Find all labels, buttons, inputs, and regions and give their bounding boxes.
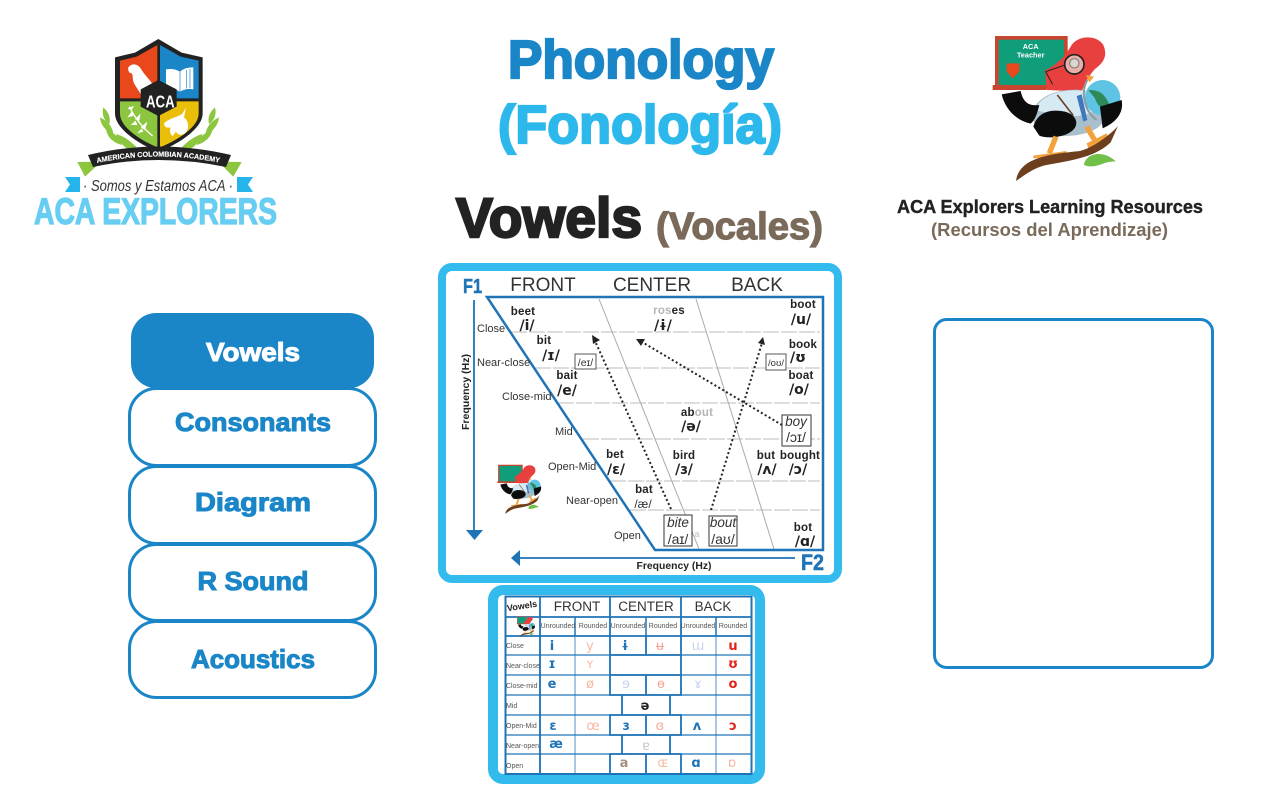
axis title: vertical frequency: Frequency (Hz): [460, 354, 472, 430]
height labels: Close-mid: [502, 391, 552, 403]
table vowel symbols: ɒ: [728, 756, 736, 771]
table headings: CENTER: [618, 599, 674, 614]
table vowel symbols: ɐ: [642, 739, 650, 754]
icon: chalkboard: Teacher: [1017, 51, 1045, 60]
diphthong box: eɪ: /eɪ/: [578, 357, 593, 369]
diphthong box: bite: [664, 515, 692, 547]
vowel word labels: bird: [673, 450, 695, 462]
table vowel symbols: ɞ: [656, 719, 664, 734]
panel: vowel chart table: [493, 590, 760, 779]
table vowel symbols: i: [550, 639, 554, 654]
table vowel symbols: ʊ: [728, 657, 738, 672]
diphthong box: oʊ: [766, 354, 786, 370]
table grid: [505, 596, 752, 774]
table row labels: Close: [506, 643, 524, 650]
banner: American Colombian Academy: AMERICAN COLOMBIAN ACADEMY: [97, 151, 220, 163]
vowel word labels: but: [757, 450, 775, 462]
table headings: BACK: [695, 599, 731, 614]
table vowel symbols: ɵ: [657, 677, 665, 692]
arrow: bite diphthong: [592, 335, 671, 509]
table row labels: Open-Mid: [506, 723, 537, 730]
diphthong box: eɪ: [575, 354, 596, 369]
table vowel symbols: ø: [586, 677, 594, 692]
vowel word labels: a: [694, 529, 700, 539]
chart: trapezoid grid: [487, 297, 823, 550]
vowel word labels: /ʊ: [790, 350, 806, 366]
table vowel symbols: ɑ: [691, 756, 701, 771]
banner: American Colombian Academy: [88, 146, 231, 167]
button: Consonants: Consonants: [175, 407, 331, 437]
button: Vowels (active): Vowels: [206, 337, 300, 367]
vowel word labels: bought: [780, 450, 820, 462]
table headings: [554, 599, 731, 614]
table row labels: Mid: [506, 703, 517, 710]
icon: chalkboard: [993, 36, 1068, 90]
table subheadings: Rounded: [719, 623, 747, 630]
vowel word labels: /ʌ/: [757, 462, 778, 478]
brand name: ACA EXPLORERS: [34, 191, 277, 232]
button: Consonants: [130, 388, 376, 466]
vowel word labels: /ɔ/: [789, 462, 808, 478]
motto: · Somos y Estamos ACA ·: [83, 178, 233, 195]
title: Fonología: (Fonología): [498, 95, 782, 155]
button: Diagram: [130, 466, 376, 544]
caption: Learning Resources: ACA Explorers Learning Resources: [897, 196, 1203, 217]
button: R Sound: R Sound: [198, 566, 308, 596]
table vowel symbols: œ: [586, 719, 600, 734]
vowel word labels: bat: [635, 484, 653, 496]
icon: chalkboard: ACA: [1023, 42, 1039, 51]
height labels: Open-Mid: [548, 461, 596, 473]
navigation menu: [130, 313, 376, 698]
table vowel symbols: ɯ: [692, 639, 704, 654]
arrow: bout diphthong: [711, 337, 765, 510]
vowel word labels: /e/: [557, 383, 578, 399]
table row labels: [506, 643, 540, 770]
icon: tiny bird mascot: [517, 617, 535, 637]
title: Phonology: Phonology: [508, 30, 774, 90]
table headings: FRONT: [554, 599, 600, 614]
button: Vowels (active): [131, 313, 374, 388]
table vowel symbols: ɘ: [622, 677, 630, 692]
arrow: F2 frequency axis: [511, 550, 795, 566]
vowel word labels: /ə/: [681, 419, 702, 435]
table subheadings: [541, 623, 747, 630]
icon: glasses: [1046, 55, 1084, 84]
vowel word labels: boat: [788, 370, 814, 382]
diphthong box: bout: [709, 515, 737, 547]
icon: sprig: [127, 106, 153, 136]
vowel word labels: roses: [653, 305, 685, 317]
vowel word labels: /æ/: [634, 497, 652, 511]
vowel word labels: beet: [511, 306, 535, 318]
vowel word labels: about: [681, 407, 713, 419]
arrow: F1 frequency axis: [466, 300, 483, 540]
vowel word labels: book: [789, 339, 818, 351]
heading: Vocales: (Vocales): [656, 206, 823, 248]
axis label: F2: F2: [801, 550, 824, 575]
vowel word labels: bot: [794, 522, 812, 534]
vowel word labels: [511, 299, 820, 550]
table vowel symbols: a: [620, 756, 628, 771]
button: Diagram: Diagram: [195, 487, 311, 517]
icon: parrot: [128, 64, 152, 94]
table vowel symbols: ɜ: [622, 719, 630, 734]
table subheadings: Unrounded: [681, 623, 715, 630]
icon: flower: [164, 107, 188, 136]
height labels: Close: [477, 323, 505, 335]
table vowel symbols: ɶ: [657, 756, 669, 771]
diphthong box: boy: [782, 414, 811, 446]
column headings: FRONT: [510, 275, 576, 296]
diphthong box: boy: boy: [785, 414, 808, 429]
height labels: Mid: [555, 426, 573, 438]
arrow: boy diphthong: [636, 339, 782, 425]
table subheadings: Rounded: [649, 623, 677, 630]
column headings: BACK: [731, 275, 783, 296]
vowel word labels: bait: [556, 370, 578, 382]
diphthong box: oʊ: /oʊ/: [768, 358, 784, 369]
table corner label: Vowels: [506, 599, 538, 613]
logo: ACA Explorers crest: [34, 39, 277, 232]
table subheadings: Unrounded: [541, 623, 575, 630]
diphthong box: bite: bite: [667, 515, 689, 530]
table vowel symbols: ɨ: [621, 639, 629, 654]
panel: empty content box: [934, 320, 1212, 668]
vowel word labels: /i/: [519, 318, 535, 334]
table vowel symbols: o: [729, 677, 738, 692]
table vowel symbols: e: [548, 677, 557, 692]
table vowel symbols: y: [586, 639, 594, 654]
table vowel symbols: ɛ: [549, 719, 557, 734]
diphthong box: bout: /aʊ/: [711, 531, 735, 547]
table vowel symbols: æ: [549, 737, 563, 752]
vowel word labels: /o/: [789, 382, 810, 398]
icon: laurel leaves: [77, 107, 242, 177]
vowel word labels: /ɜ/: [675, 462, 694, 478]
button: Acoustics: Acoustics: [191, 644, 315, 674]
diphthong box: bout: bout: [710, 515, 737, 530]
axis label: F1: F1: [463, 276, 482, 298]
table row labels: Near-close: [506, 663, 540, 670]
height labels: [477, 323, 641, 542]
icon: teacher bird mascot: [993, 36, 1122, 181]
height labels: Near-open: [566, 495, 618, 507]
vowel word labels: boot: [790, 299, 816, 311]
table vowel symbols: ʉ: [656, 639, 665, 654]
diphthong box: boy: /ɔɪ/: [786, 429, 806, 445]
vowel word labels: bet: [606, 449, 624, 461]
column headings: CENTER: [613, 275, 691, 296]
button: R Sound: [130, 544, 376, 620]
vowel word labels: bit: [537, 335, 551, 347]
height labels: Open: [614, 530, 641, 542]
table vowel symbols: ʌ: [693, 719, 702, 734]
vowel word labels: /ɛ/: [607, 462, 626, 478]
ribbons: [65, 177, 253, 192]
table vowel symbols: ɪ: [548, 657, 556, 672]
icon: open book: [166, 67, 193, 92]
button: Acoustics: [130, 622, 376, 698]
vowel word labels: /u/: [791, 312, 812, 328]
icon: small bird mascot: [497, 465, 541, 514]
table vowel symbols: [548, 639, 738, 771]
heading: Vowels: Vowels: [456, 186, 642, 249]
icon: shield: [115, 39, 203, 152]
caption: Recursos del Aprendizaje: (Recursos del Aprendizaje): [931, 220, 1168, 240]
table subheadings: Rounded: [579, 623, 607, 630]
table vowel symbols: ɤ: [694, 677, 702, 692]
icon: shield: ACA: [146, 91, 175, 111]
panel: vowel trapezoid diagram: [442, 267, 838, 579]
table subheadings: Unrounded: [611, 623, 645, 630]
diphthong box: bite: /aɪ/: [668, 531, 688, 547]
column headings: [510, 275, 783, 296]
vowel word labels: /ɨ/: [654, 318, 673, 334]
table row labels: Near-open: [506, 743, 539, 750]
vowel word labels: /ɑ/: [795, 534, 816, 550]
table vowel symbols: ʏ: [586, 657, 594, 672]
table row labels: Open: [506, 763, 523, 770]
table vowel symbols: ɔ: [729, 719, 737, 734]
vowel word labels: /ɪ/: [542, 348, 561, 364]
axis title: horizontal frequency: Frequency (Hz): [636, 560, 712, 572]
table vowel symbols: ə: [641, 699, 650, 714]
table vowel symbols: u: [728, 639, 738, 654]
height labels: Near-close: [477, 357, 530, 369]
table row labels: Close-mid: [506, 683, 538, 690]
